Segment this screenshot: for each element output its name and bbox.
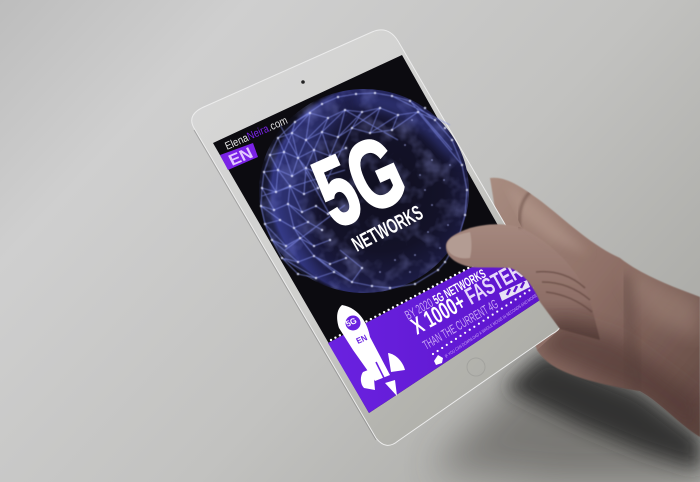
logo: EN badge [220,143,258,170]
cloud icon [434,355,443,365]
hand: back of hand and wrist [490,178,700,437]
tablet and hand shadow [430,350,700,482]
camera [301,80,305,84]
subtitle: NETWORKS: NETWORKS [348,202,427,256]
banner dotted divider [433,286,536,354]
purple banner [328,247,540,413]
globe [259,89,469,293]
tablet body [192,30,561,445]
banner line: than the current 4g: THAN THE CURRENT 4G [420,296,501,353]
hand: thumb and palm over the tablet edge [446,185,700,440]
logo: ElenaNeira.com: ElenaNeira.com [223,115,290,153]
banner line: by 2020: BY 2020 5G NETWORKS [402,266,488,323]
banner footnote: IF YOU CAN DOWNLOAD A WHOLE MOVIE IN SECONDS AND MORE [444,293,538,359]
screen [213,55,540,413]
logo: EN badge: EN [226,145,256,170]
home button [467,358,485,376]
speed badge [499,280,530,301]
globe cloud texture [259,89,469,293]
rocket icon [337,305,405,396]
title: 5G: 5G [298,114,420,248]
globe network mesh [261,93,467,288]
rocket icon: 5G [344,315,359,329]
rocket icon: EN [354,332,369,346]
banner dotted edge [331,264,476,340]
thumbnail [447,232,472,258]
banner line: x 1000+ faster: X 1000+ FASTER [407,258,527,340]
hand shading and knuckle wrinkles [516,192,700,433]
